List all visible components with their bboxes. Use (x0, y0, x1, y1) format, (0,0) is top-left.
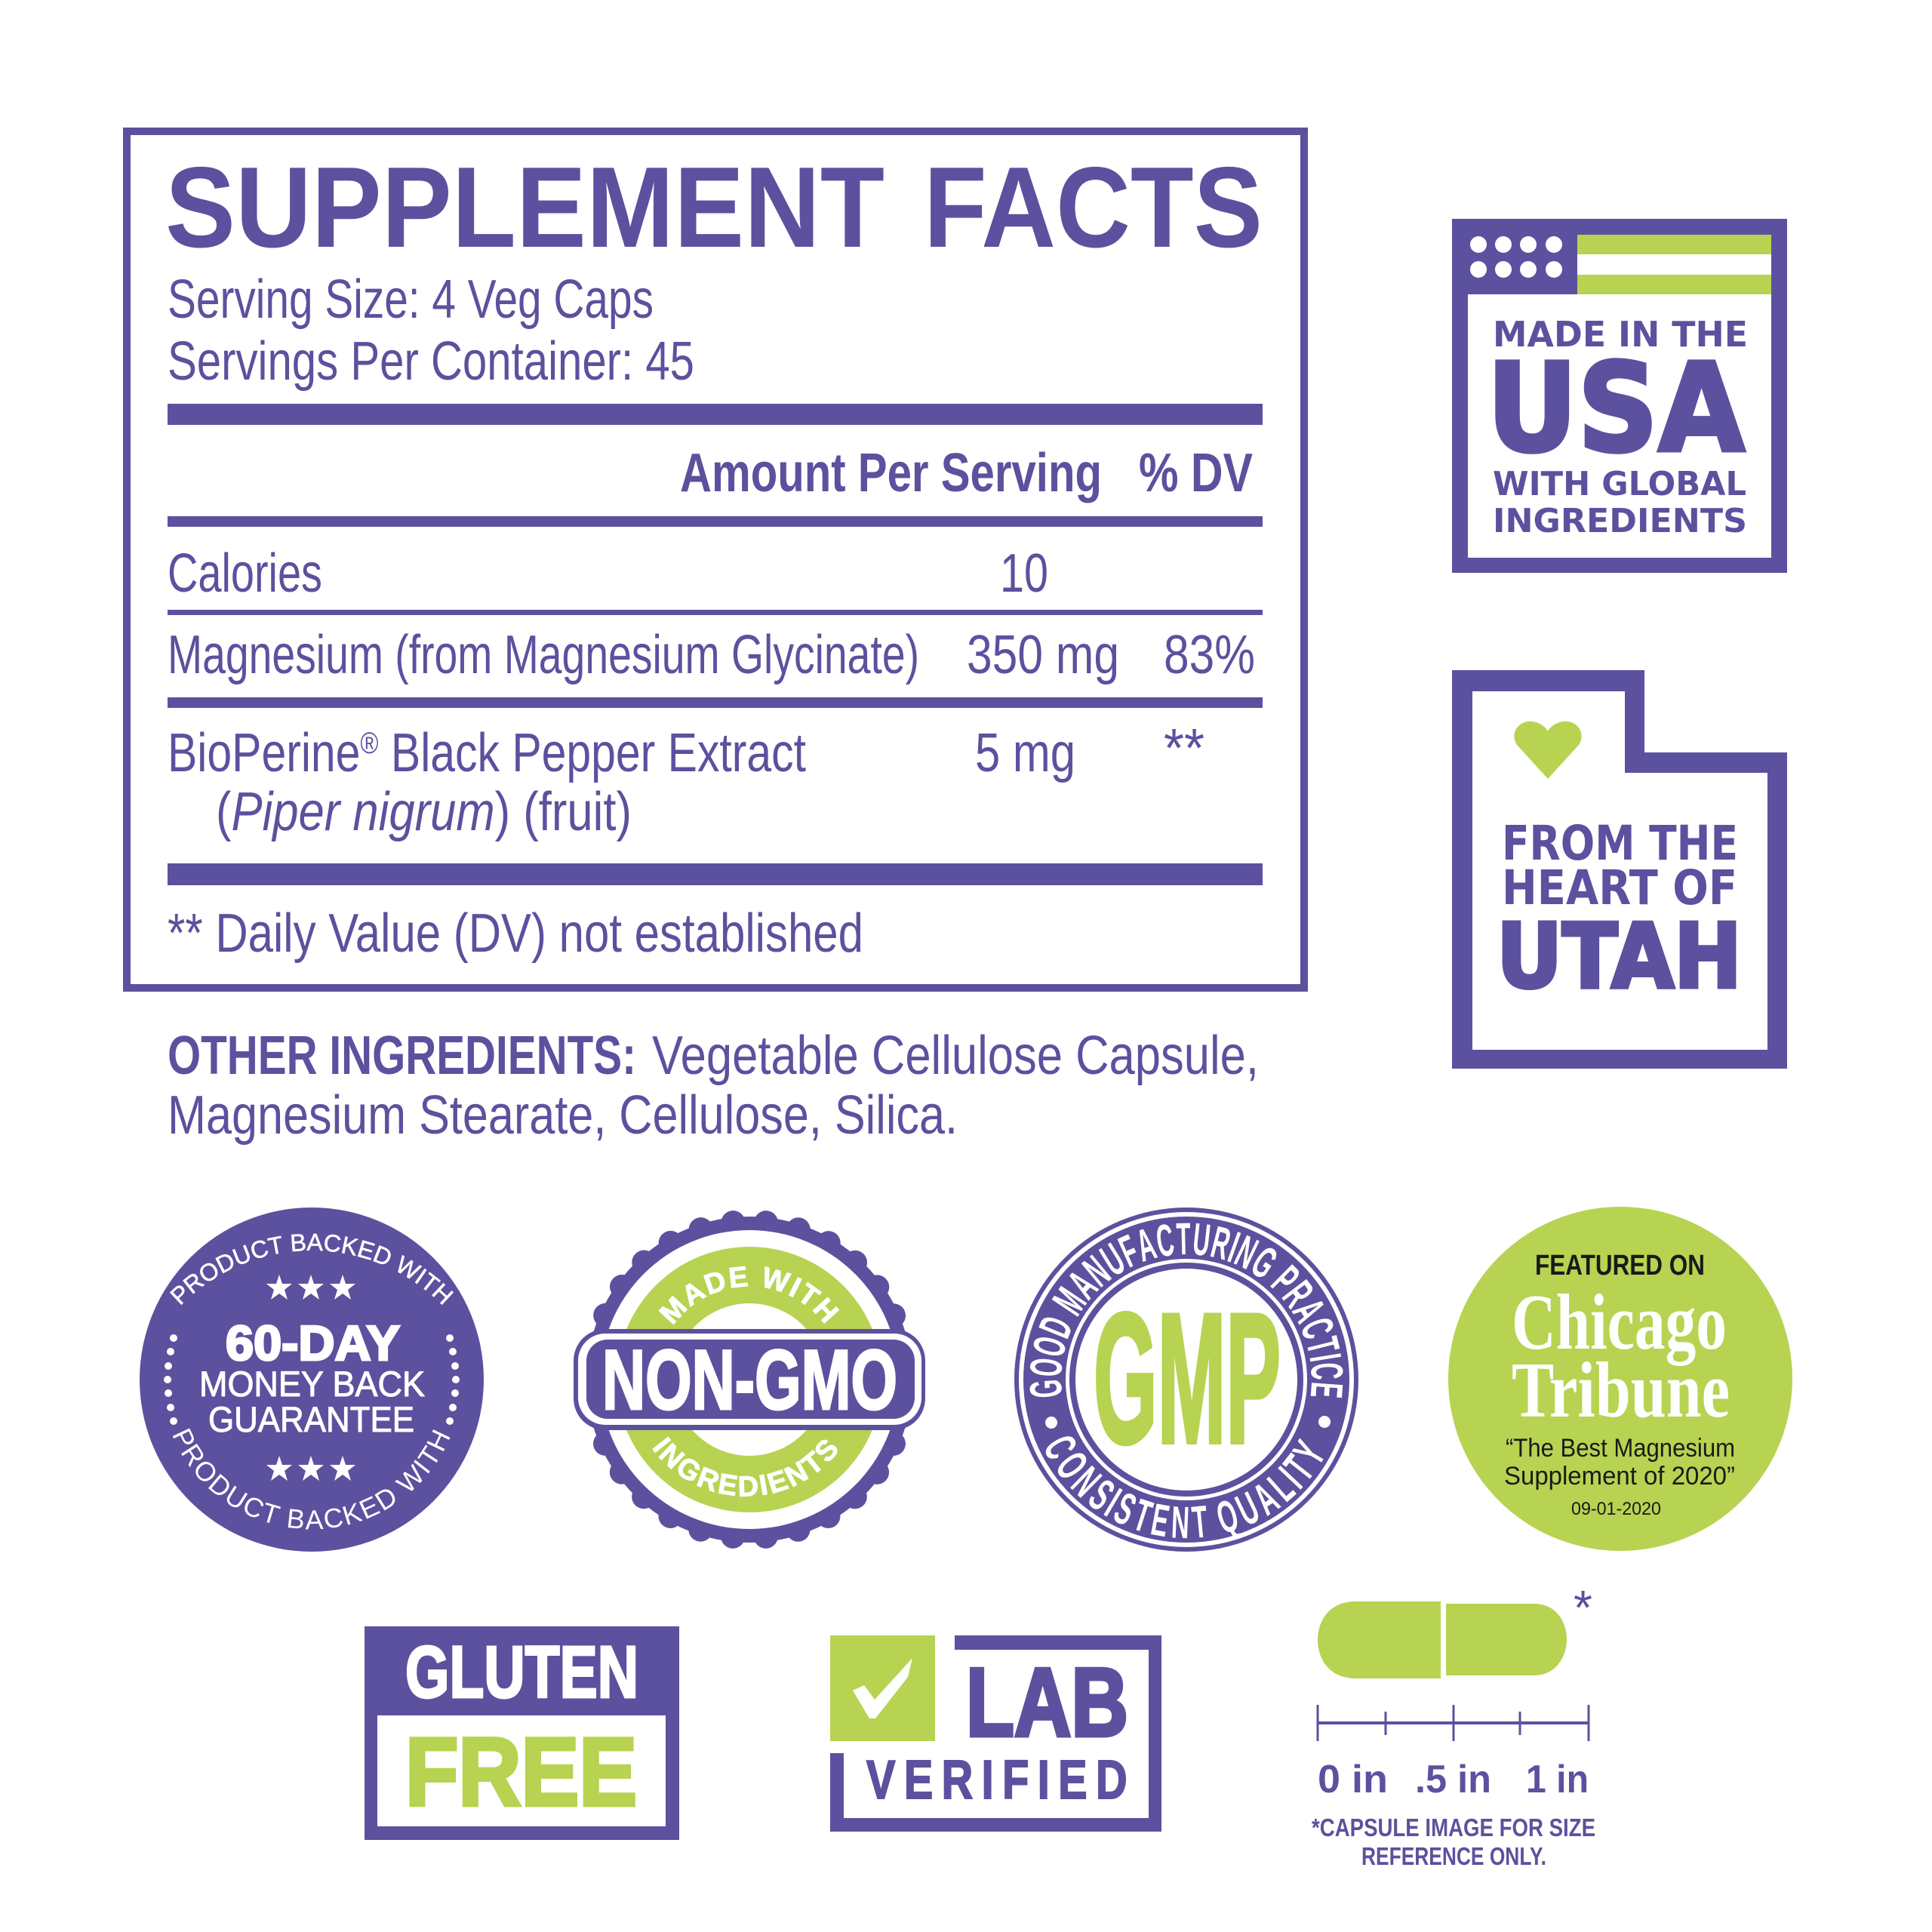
ruler (1318, 1705, 1589, 1741)
ruler labels: 1 in (1526, 1758, 1589, 1801)
arc text bottom: N (1171, 1497, 1190, 1549)
arc text top: O (1024, 1332, 1077, 1361)
ruler labels (1318, 1758, 1589, 1801)
arc text top: D (1030, 1310, 1083, 1344)
arc text bottom: I (1097, 1479, 1129, 1526)
arc text top: MADE WITH (658, 1266, 839, 1325)
ruler labels: 0 in (1318, 1758, 1388, 1801)
arc text bottom: T (1128, 1490, 1158, 1543)
badge: non-gmo (574, 1211, 925, 1549)
badge text: MADE IN THE (1493, 314, 1748, 355)
badge text: INGREDIENTS (1493, 502, 1747, 540)
frame (830, 1635, 1161, 1832)
arc text top: O (1021, 1356, 1072, 1379)
arc text top (1021, 1214, 1352, 1400)
arc text top: N (1228, 1226, 1265, 1279)
arc text top: C (1153, 1215, 1177, 1267)
row: bioperine: (Piper nigrum) (fruit) (216, 782, 632, 842)
quote: Supplement of 2020” (1504, 1462, 1735, 1491)
row: magnesium: Magnesium (from Magnesium Glycinate) (168, 625, 919, 685)
title: SUPPLEMENT (165, 143, 884, 272)
badge text: USA (1487, 338, 1745, 480)
dots (164, 1334, 460, 1425)
arc text top: G (1242, 1237, 1285, 1289)
arc text bottom: INGREDIENTS (652, 1436, 838, 1497)
arc text top: I (1300, 1351, 1350, 1364)
badge: gluten free: FREE (405, 1718, 637, 1826)
capsule note: *CAPSULE IMAGE FOR SIZE (1312, 1814, 1595, 1841)
guarantee text: 60-DAY (226, 1315, 400, 1371)
arc text bottom: T (1190, 1497, 1210, 1549)
badge: gluten free (365, 1626, 679, 1840)
serving info (168, 269, 694, 392)
arc text bottom: E (1147, 1494, 1173, 1547)
arc text top: C (1291, 1312, 1343, 1346)
other ingredients (168, 1026, 1259, 1146)
arc text top: T (1296, 1333, 1349, 1358)
guarantee text: MONEY BACK (199, 1364, 425, 1404)
featured on: FEATURED ON (1535, 1250, 1705, 1281)
dots (1045, 1416, 1331, 1429)
quote (1504, 1434, 1735, 1519)
arc text top: E (1300, 1380, 1352, 1400)
arc text top: G (1021, 1378, 1072, 1399)
arc text bottom: S (1106, 1483, 1143, 1536)
flag stars (1470, 236, 1562, 278)
row: calories (168, 543, 1048, 604)
column headers: % DV (1139, 443, 1253, 503)
badge: gmp: GMP (1094, 1275, 1281, 1481)
badge: gluten free: GLUTEN (405, 1631, 638, 1713)
capsule note: REFERENCE ONLY. (1361, 1842, 1546, 1870)
row: calories: 10 (1000, 543, 1048, 604)
serving info: Servings Per Container: 45 (168, 331, 694, 392)
badge: chicago tribune (1448, 1207, 1792, 1551)
arc text top: M (1044, 1280, 1097, 1324)
panel: supplement facts (127, 131, 1304, 988)
serving info: Serving Size: 4 Veg Caps (168, 269, 654, 330)
other ingredients: OTHER INGREDIENTS: (168, 1026, 636, 1086)
arc text top: R (1206, 1217, 1235, 1270)
arc text bottom: PRODUCT BACKED WITH (172, 1428, 450, 1529)
badge: 60-day money back guarantee (140, 1208, 484, 1552)
row: bioperine: ® (360, 727, 379, 760)
arc text top: R (1272, 1272, 1323, 1317)
icon: heart (1514, 721, 1582, 779)
badge text: HEART OF (1502, 860, 1737, 915)
icon: check mark (830, 1635, 935, 1741)
row: bioperine: ** (1164, 718, 1204, 779)
capsule note (1312, 1814, 1595, 1870)
other ingredients: Magnesium Stearate, Cellulose, Silica. (168, 1085, 958, 1146)
arc text top: A (1282, 1291, 1334, 1331)
arc text bottom: A (1244, 1473, 1287, 1525)
guarantee text (199, 1315, 425, 1439)
arc text top: I (1222, 1223, 1245, 1272)
badge: lab verified: VERIFIED (866, 1749, 1128, 1810)
arc text top: PRODUCT BACKED WITH (169, 1233, 454, 1306)
masthead (1512, 1278, 1730, 1434)
badge: gmp (1014, 1208, 1358, 1552)
row: bioperine (168, 718, 1204, 842)
badge: from the heart of utah (1452, 670, 1787, 1069)
stars (266, 1275, 355, 1481)
row: magnesium: 350 mg (967, 625, 1119, 685)
banner: NON-GMO (602, 1333, 897, 1427)
title: FACTS (924, 143, 1263, 272)
column headers: Amount Per Serving (680, 443, 1102, 503)
scalloped edge (586, 1217, 912, 1543)
arc text top: C (1300, 1361, 1352, 1381)
arc text bottom: S (1080, 1470, 1123, 1521)
badge text (1497, 816, 1742, 1008)
arc text bottom: Y (1284, 1433, 1336, 1473)
arc text top: P (1262, 1257, 1308, 1303)
icon: capsule (1318, 1601, 1567, 1678)
other ingredients: Vegetable Cellulose Capsule, (652, 1026, 1259, 1086)
arc text bottom: N (1062, 1458, 1110, 1506)
masthead: Chicago (1512, 1278, 1727, 1366)
row: bioperine: 5 mg (975, 723, 1075, 783)
row: calories: Calories (168, 543, 322, 604)
arc text top: U (1093, 1235, 1134, 1286)
arc text top: U (1190, 1214, 1213, 1266)
arc text bottom (1033, 1428, 1336, 1549)
panel border (127, 131, 1304, 988)
row: bioperine: BioPerine (168, 723, 403, 783)
quote: 09-01-2020 (1571, 1499, 1661, 1519)
quote: “The Best Magnesium (1506, 1434, 1735, 1463)
badge: lab verified: LAB (966, 1648, 1128, 1757)
arc text bottom: T (1275, 1447, 1324, 1490)
arc text bottom: U (1229, 1482, 1267, 1536)
row: bioperine: Black Pepper Extract (379, 723, 806, 783)
arc text bottom: C (1033, 1428, 1087, 1467)
arc text top: N (1075, 1247, 1120, 1297)
arc text top: F (1112, 1226, 1146, 1278)
guarantee text: GUARANTEE (208, 1399, 414, 1439)
badge text (1487, 314, 1748, 540)
badge: made in the usa (1452, 219, 1787, 573)
flag stripes (1577, 235, 1771, 294)
footnote: ** Daily Value (DV) not established (168, 903, 863, 964)
row: magnesium: 83% (1164, 625, 1255, 685)
badge text: WITH GLOBAL (1493, 465, 1746, 503)
badge text: UTAH (1497, 904, 1742, 1008)
badge text: FROM THE (1502, 816, 1738, 871)
arc text top: A (1131, 1219, 1161, 1272)
arc text top: A (1059, 1262, 1107, 1309)
arc text bottom: L (1259, 1463, 1304, 1511)
capsule size reference (1312, 1580, 1595, 1870)
asterisk: * (1574, 1580, 1592, 1635)
masthead: Tribune (1512, 1346, 1730, 1434)
arc text bottom: O (1045, 1443, 1097, 1489)
badge: lab verified (830, 1635, 1161, 1832)
arc text bottom: I (1270, 1458, 1312, 1498)
arc text top: T (1176, 1214, 1191, 1265)
ruler labels: .5 in (1415, 1758, 1491, 1801)
banner (574, 1329, 925, 1430)
arc text bottom: Q (1211, 1490, 1244, 1544)
